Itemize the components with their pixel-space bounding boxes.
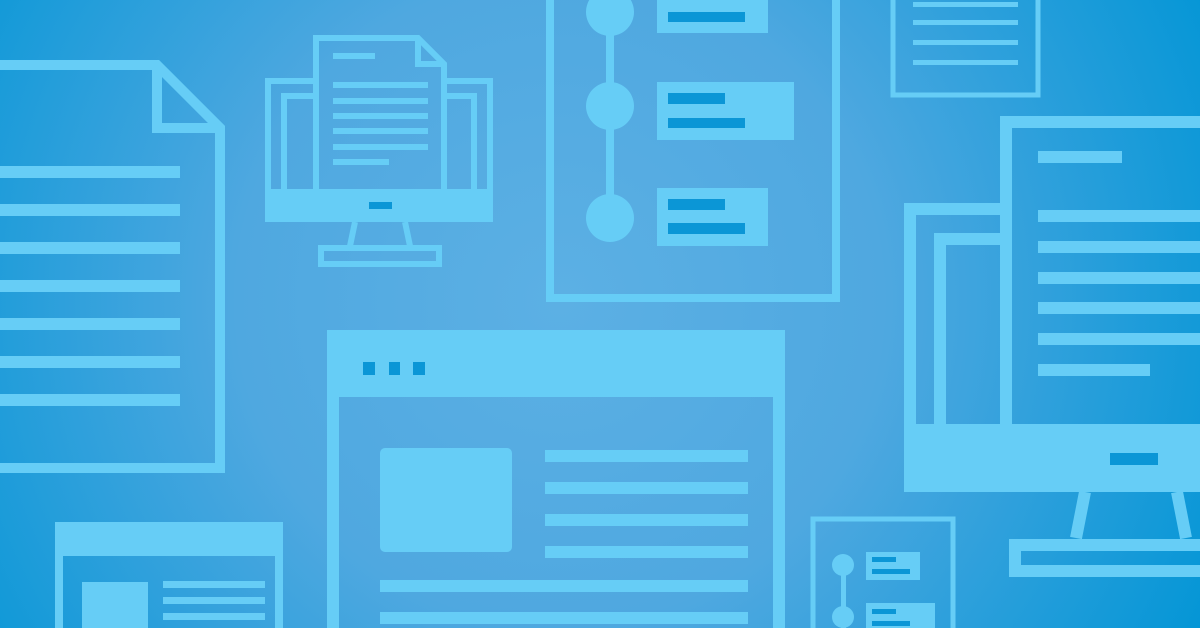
panel: small timeline bottom: [813, 519, 953, 628]
document: left: [0, 65, 220, 468]
panel: timeline top center: [550, 0, 836, 298]
document: top right: [893, 0, 1038, 95]
browser window: bottom left: [55, 522, 283, 628]
monitor with document: top left: [265, 38, 493, 264]
browser window: center: [327, 330, 785, 628]
monitor with document: right: [904, 122, 1200, 571]
